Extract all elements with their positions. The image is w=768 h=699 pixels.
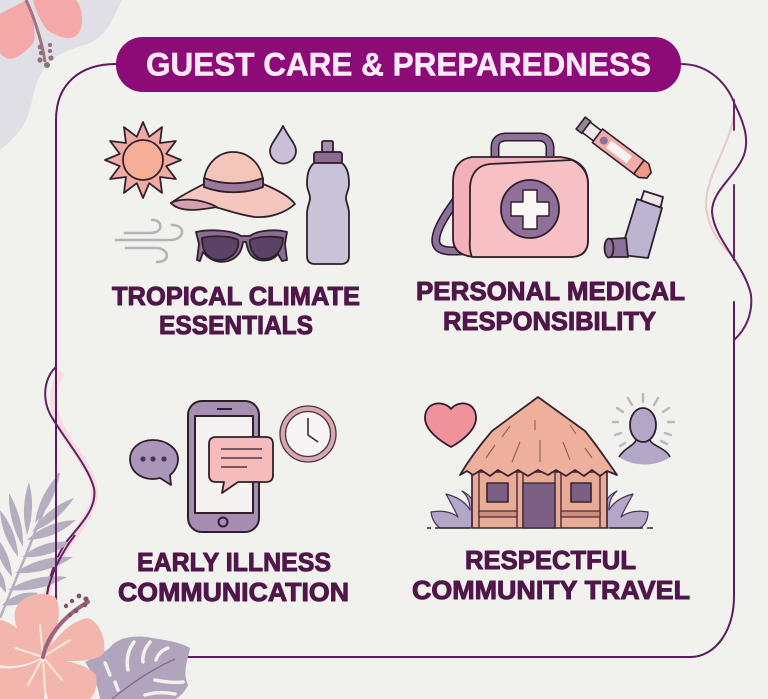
icon: clock [280, 406, 336, 462]
decoration: palm frond [0, 473, 76, 618]
label: personal medical responsibility: PERSONAL MEDICAL [416, 276, 685, 306]
icon: thatched hut [427, 397, 653, 528]
icon: water bottle [307, 141, 349, 264]
title banner: GUEST CARE & PREPAREDNESS [146, 46, 651, 82]
decoration: monstera leaf [85, 636, 190, 699]
panel: respectful community travel [412, 394, 690, 605]
icon: sunglasses [196, 230, 287, 262]
icon: wind [116, 220, 182, 262]
label: personal medical responsibility: RESPONSIBILITY [443, 306, 656, 336]
decoration: top-left lavender blob and hibiscus [0, 0, 122, 150]
label: early illness communication: EARLY ILLNESS [137, 547, 331, 577]
panel: tropical climate essentials [105, 122, 360, 340]
label: early illness communication [118, 547, 349, 607]
label: tropical climate essentials: ESSENTIALS [159, 310, 313, 340]
icon: water drop [270, 126, 296, 164]
icon: heart [425, 403, 476, 447]
icon: person with rays [613, 394, 674, 464]
label: respectful community travel: COMMUNITY TRAVEL [412, 575, 690, 605]
icon: message bubble [209, 437, 273, 493]
frame: left line and ribbon passing over the palm [47, 470, 75, 600]
panel: early illness communication [118, 401, 349, 607]
icon: sun hat [171, 152, 295, 217]
icon: sun [105, 122, 181, 198]
icon: inhaler [604, 191, 663, 258]
label: personal medical responsibility [416, 276, 685, 336]
label: respectful community travel [412, 545, 690, 605]
label: tropical climate essentials: TROPICAL CLIMATE [112, 281, 360, 311]
icon: auto-injector pen [576, 116, 654, 182]
label: early illness communication: COMMUNICATION [118, 577, 349, 607]
icon: smartphone [188, 401, 259, 532]
frame: rounded border with wavy ribbons [45, 64, 751, 657]
icon: chat bubble [130, 440, 178, 485]
label: respectful community travel: RESPECTFUL [465, 545, 636, 575]
icon: first aid bag [436, 137, 588, 257]
panel: personal medical responsibility [416, 116, 685, 336]
decoration: bottom-left hibiscus [0, 594, 104, 699]
label: tropical climate essentials [112, 281, 360, 340]
title banner [116, 37, 681, 92]
